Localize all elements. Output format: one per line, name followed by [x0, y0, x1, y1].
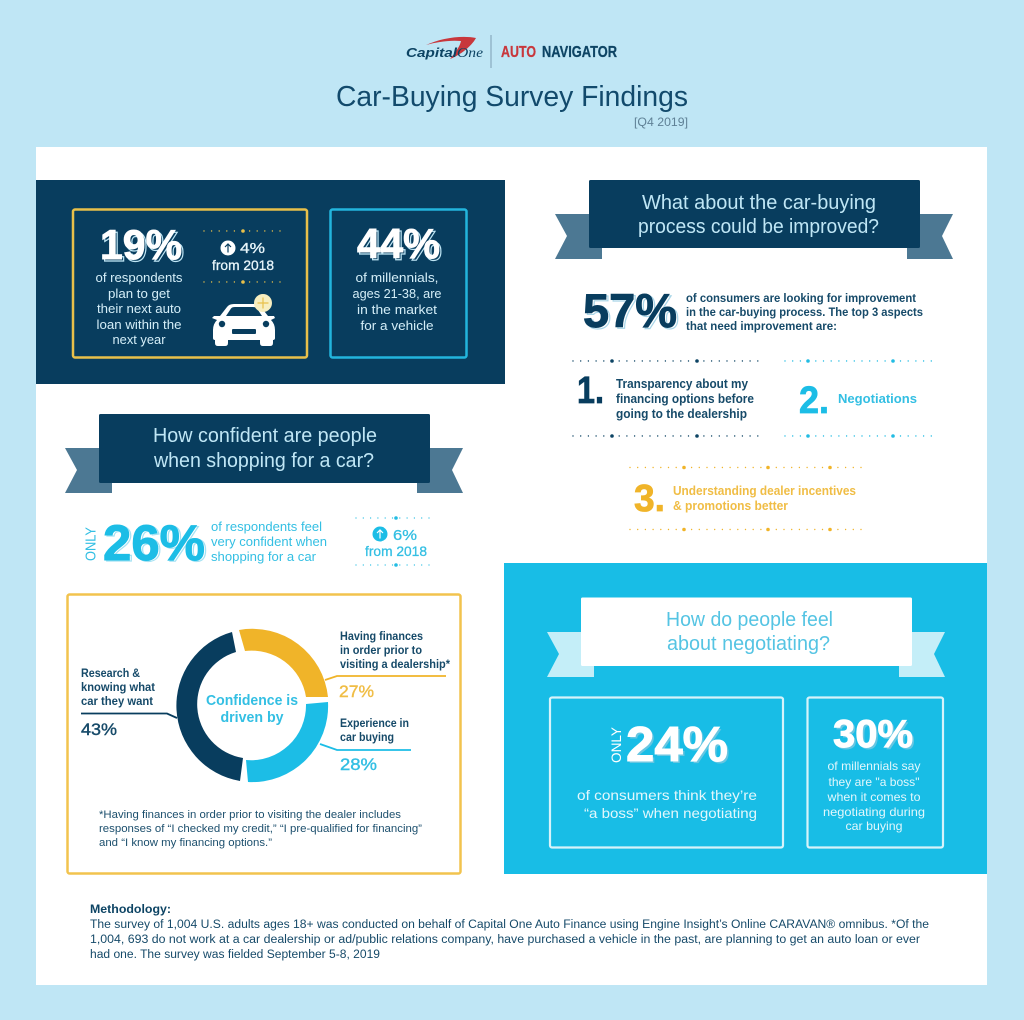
- label: experience 28 percent: car buying: [340, 730, 394, 744]
- stat: 57 percent: 57%: [585, 286, 679, 338]
- stat: 6 percent from 2018: 6%: [393, 527, 417, 544]
- banner: confidence: How confident are people: [153, 425, 377, 447]
- banner: car-buying process: What about the car-buying: [642, 192, 876, 214]
- stat: 6 percent from 2018: from 2018: [365, 543, 427, 559]
- stat box: 30 percent: negotiating during: [823, 805, 925, 819]
- stat: 26 percent: ONLY: [84, 527, 100, 561]
- label: research 43 percent: 43%: [81, 720, 117, 739]
- stat: 57 percent: in the car-buying process. The top 3 aspects: [686, 307, 923, 319]
- label: experience 28 percent: Experience in: [340, 716, 409, 730]
- yellow stat box: [73, 210, 307, 358]
- yellow stat box: of respondents: [96, 270, 183, 285]
- donut centre label: Confidence is: [206, 693, 298, 709]
- date label: [Q4 2019]: [634, 115, 688, 129]
- stat: 57 percent: [583, 284, 923, 338]
- item 3: dealer incentives: & promotions better: [673, 499, 788, 513]
- banner: negotiating: [547, 598, 945, 677]
- label: finances 27 percent: in order prior to: [340, 643, 422, 657]
- methodology: The survey of 1,004 U.S. adults ages 18+ was conducted on behalf of Capital One Auto Finance using Engine Insight’s Online CARAVAN® omnibus. *Of the: [90, 919, 929, 931]
- logo: Capital One Auto Navigator: NAVIGATOR: [542, 44, 617, 61]
- yellow stat box: 19%: [102, 223, 184, 270]
- title: Car-Buying Survey Findings: [336, 81, 688, 113]
- footnote: and “I know my financing options.”: [99, 837, 272, 849]
- methodology: had one. The survey was fielded September 5-8, 2019: [90, 949, 380, 961]
- banner: confidence: when shopping for a car?: [153, 450, 374, 472]
- banner: confidence: [65, 414, 463, 493]
- stat box: 30 percent: when it comes to: [826, 790, 921, 804]
- stat box: 24 percent: “a boss” when negotiating: [584, 805, 757, 821]
- stat: 26 percent: shopping for a car: [211, 549, 317, 564]
- banner: negotiating: How do people feel: [666, 609, 833, 631]
- stat box: 30 percent: of millennials say: [828, 759, 920, 773]
- logo: Capital One Auto Navigator: [406, 35, 617, 68]
- label: experience 28 percent: [320, 716, 411, 774]
- label: research 43 percent: car they want: [81, 694, 153, 708]
- stat: 57 percent: of consumers are looking for improvement: [686, 293, 916, 305]
- yellow stat box: plan to get: [108, 286, 170, 301]
- logo: Capital One Auto Navigator: AUTO: [501, 44, 536, 61]
- item 1: transparency: [573, 359, 759, 438]
- blue stat box: 44%: [359, 222, 442, 269]
- label: experience 28 percent: 28%: [340, 755, 377, 774]
- stat box: 30 percent: they are "a boss": [828, 775, 920, 789]
- item 1: transparency: going to the dealership: [616, 407, 747, 421]
- stat box: 24 percent: [550, 698, 783, 848]
- donut chart: [176, 629, 328, 782]
- label: research 43 percent: [81, 666, 177, 739]
- blue stat box: of millennials,: [356, 270, 438, 285]
- yellow stat box: 19%: [100, 221, 182, 268]
- methodology: [90, 904, 929, 961]
- logo: Capital One Auto Navigator: Capital: [406, 46, 458, 60]
- stat box: 24 percent: 24%: [626, 718, 728, 772]
- donut centre label: [206, 693, 298, 726]
- white content panel: [36, 147, 987, 985]
- footnote: [99, 809, 422, 849]
- stat: 6 percent from 2018: [356, 516, 436, 567]
- stat box: 30 percent: [808, 698, 943, 848]
- icon: car: [212, 294, 275, 346]
- label: finances 27 percent: visiting a dealership*: [340, 657, 450, 671]
- stat box: 24 percent: of consumers think they’re: [577, 787, 757, 803]
- panel: negotiating: [504, 563, 987, 874]
- yellow stat box: next year: [112, 332, 166, 347]
- stat box: 30 percent: car buying: [846, 819, 902, 833]
- yellow stat box: their next auto: [97, 301, 181, 316]
- stat: 26 percent: of respondents feel: [211, 519, 322, 534]
- label: finances 27 percent: 27%: [339, 682, 374, 701]
- stat: 57 percent: 57%: [583, 284, 677, 337]
- stat box: 30 percent: 30%: [833, 713, 913, 756]
- stat: 26 percent: very confident when: [211, 534, 327, 549]
- stat: 57 percent: that need improvement are:: [686, 321, 837, 333]
- item 3: dealer incentives: [630, 466, 862, 531]
- item 2: negotiations: Negotiations: [838, 392, 917, 406]
- stat box: 24 percent: ONLY: [609, 727, 624, 763]
- item 3: dealer incentives: 3.: [634, 478, 665, 520]
- banner: car-buying process: process could be improved?: [638, 216, 879, 238]
- item 1: transparency: financing options before: [616, 392, 754, 406]
- panel: loan and millennial stats: [36, 180, 505, 384]
- label: research 43 percent: Research &: [81, 666, 140, 680]
- blue stat box: [330, 210, 466, 358]
- stat: 26 percent: 26%: [105, 516, 207, 572]
- item 1: transparency: 1.: [577, 370, 604, 412]
- blue stat box: ages 21-38, are: [352, 286, 442, 301]
- blue stat box: 44%: [357, 220, 440, 267]
- methodology: Methodology:: [90, 904, 171, 916]
- yellow stat box: loan within the: [96, 317, 182, 332]
- yellow stat box: from 2018: [212, 257, 274, 273]
- blue stat box: in the market: [357, 302, 437, 317]
- yellow stat box: 4%: [240, 240, 265, 257]
- stat box: 24 percent: 24%: [628, 720, 730, 774]
- stat box: 30 percent: 30%: [835, 715, 915, 758]
- label: finances 27 percent: [325, 629, 450, 701]
- banner: car-buying process: [555, 180, 953, 259]
- label: finances 27 percent: Having finances: [340, 629, 423, 643]
- footnote: responses of “I checked my credit,” “I pre-qualified for financing”: [99, 823, 422, 835]
- item 1: transparency: Transparency about my: [616, 377, 748, 391]
- panel: confidence drivers: [68, 594, 460, 874]
- banner: negotiating: about negotiating?: [667, 633, 830, 655]
- footnote: *Having finances in order prior to visiting the dealer includes: [99, 809, 402, 821]
- item 2: negotiations: 2.: [799, 380, 829, 422]
- donut centre label: driven by: [220, 710, 284, 726]
- item 3: dealer incentives: Understanding dealer incentives: [673, 484, 856, 498]
- logo: Capital One Auto Navigator: One: [457, 46, 483, 61]
- label: research 43 percent: knowing what: [81, 680, 155, 694]
- item 2: negotiations: [785, 359, 933, 438]
- blue stat box: for a vehicle: [360, 318, 434, 333]
- stat: 26 percent: [84, 515, 327, 572]
- stat: 26 percent: 26%: [103, 515, 205, 571]
- methodology: 1,004, 693 do not work at a car dealership or ad/public relations company, have purchased a vehicle in the past, are planning to get an auto loan or ever: [90, 934, 920, 946]
